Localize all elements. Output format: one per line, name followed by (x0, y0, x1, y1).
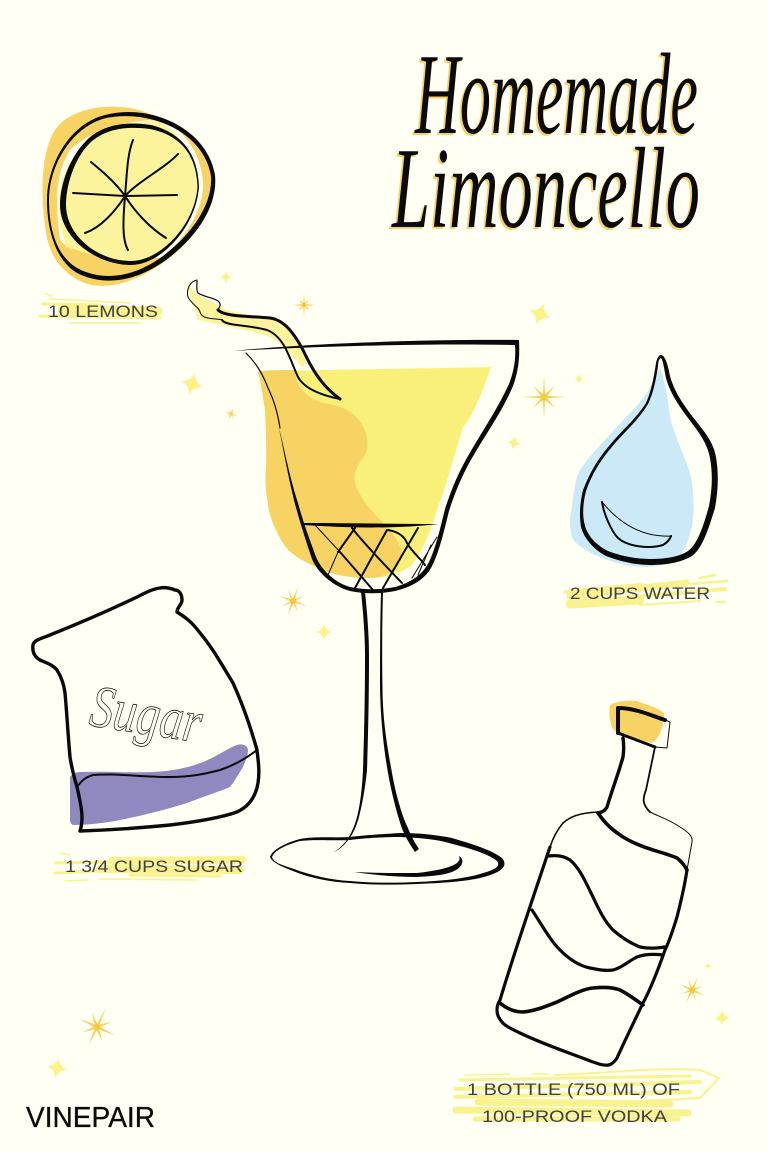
sugar level line (77, 750, 257, 787)
label: 1 3/4 cups sugar: 1 3/4 CUPS SUGAR (65, 857, 243, 876)
bottle cap fill (609, 701, 664, 743)
bottle cap outline (618, 708, 670, 748)
sugar bag outline (33, 588, 259, 831)
label: 1 bottle (750 ml) of 100-proof vodka: 1 BOTTLE (750 ML) OF (467, 1080, 680, 1099)
label: 1 bottle (750 ml) of 100-proof vodka: 100-PROOF VODKA (482, 1107, 668, 1126)
title (389, 31, 700, 254)
glass base (270, 833, 504, 885)
bottle neck and body (497, 738, 692, 1065)
icon: water drop (570, 355, 718, 567)
label: 2 cups water: 2 CUPS WATER (570, 584, 710, 603)
icon: lemon twist fill (186, 283, 307, 367)
label: 2 cups water (566, 575, 727, 605)
icon: vodka bottle (497, 701, 692, 1065)
icon: lemon slice (42, 107, 215, 286)
glass yellow liquid (258, 367, 491, 578)
glass stem (333, 592, 419, 853)
glass lattice (303, 523, 439, 590)
label: 1 bottle (750 ml) of 100-proof vodka (455, 1069, 719, 1126)
icon: cocktail glass (233, 340, 519, 885)
logo: VinePair: VINEPAIR (26, 1102, 155, 1134)
label: 10 lemons: 10 LEMONS (48, 302, 158, 321)
sugar fill (70, 744, 248, 825)
glass orange liquid (258, 370, 402, 578)
bottle waves (500, 813, 687, 1012)
glass rim and bowl (233, 340, 519, 593)
icon: sugar bag (33, 588, 259, 831)
icon: lemon twist outline (187, 280, 340, 399)
label: 1 3/4 cups sugar (55, 853, 243, 881)
sugar script word: Sugar (86, 673, 207, 755)
sparkles: orange starbursts (70, 293, 711, 1054)
sparkles: pale four-point stars (45, 271, 729, 1080)
label: 10 lemons (40, 294, 160, 323)
